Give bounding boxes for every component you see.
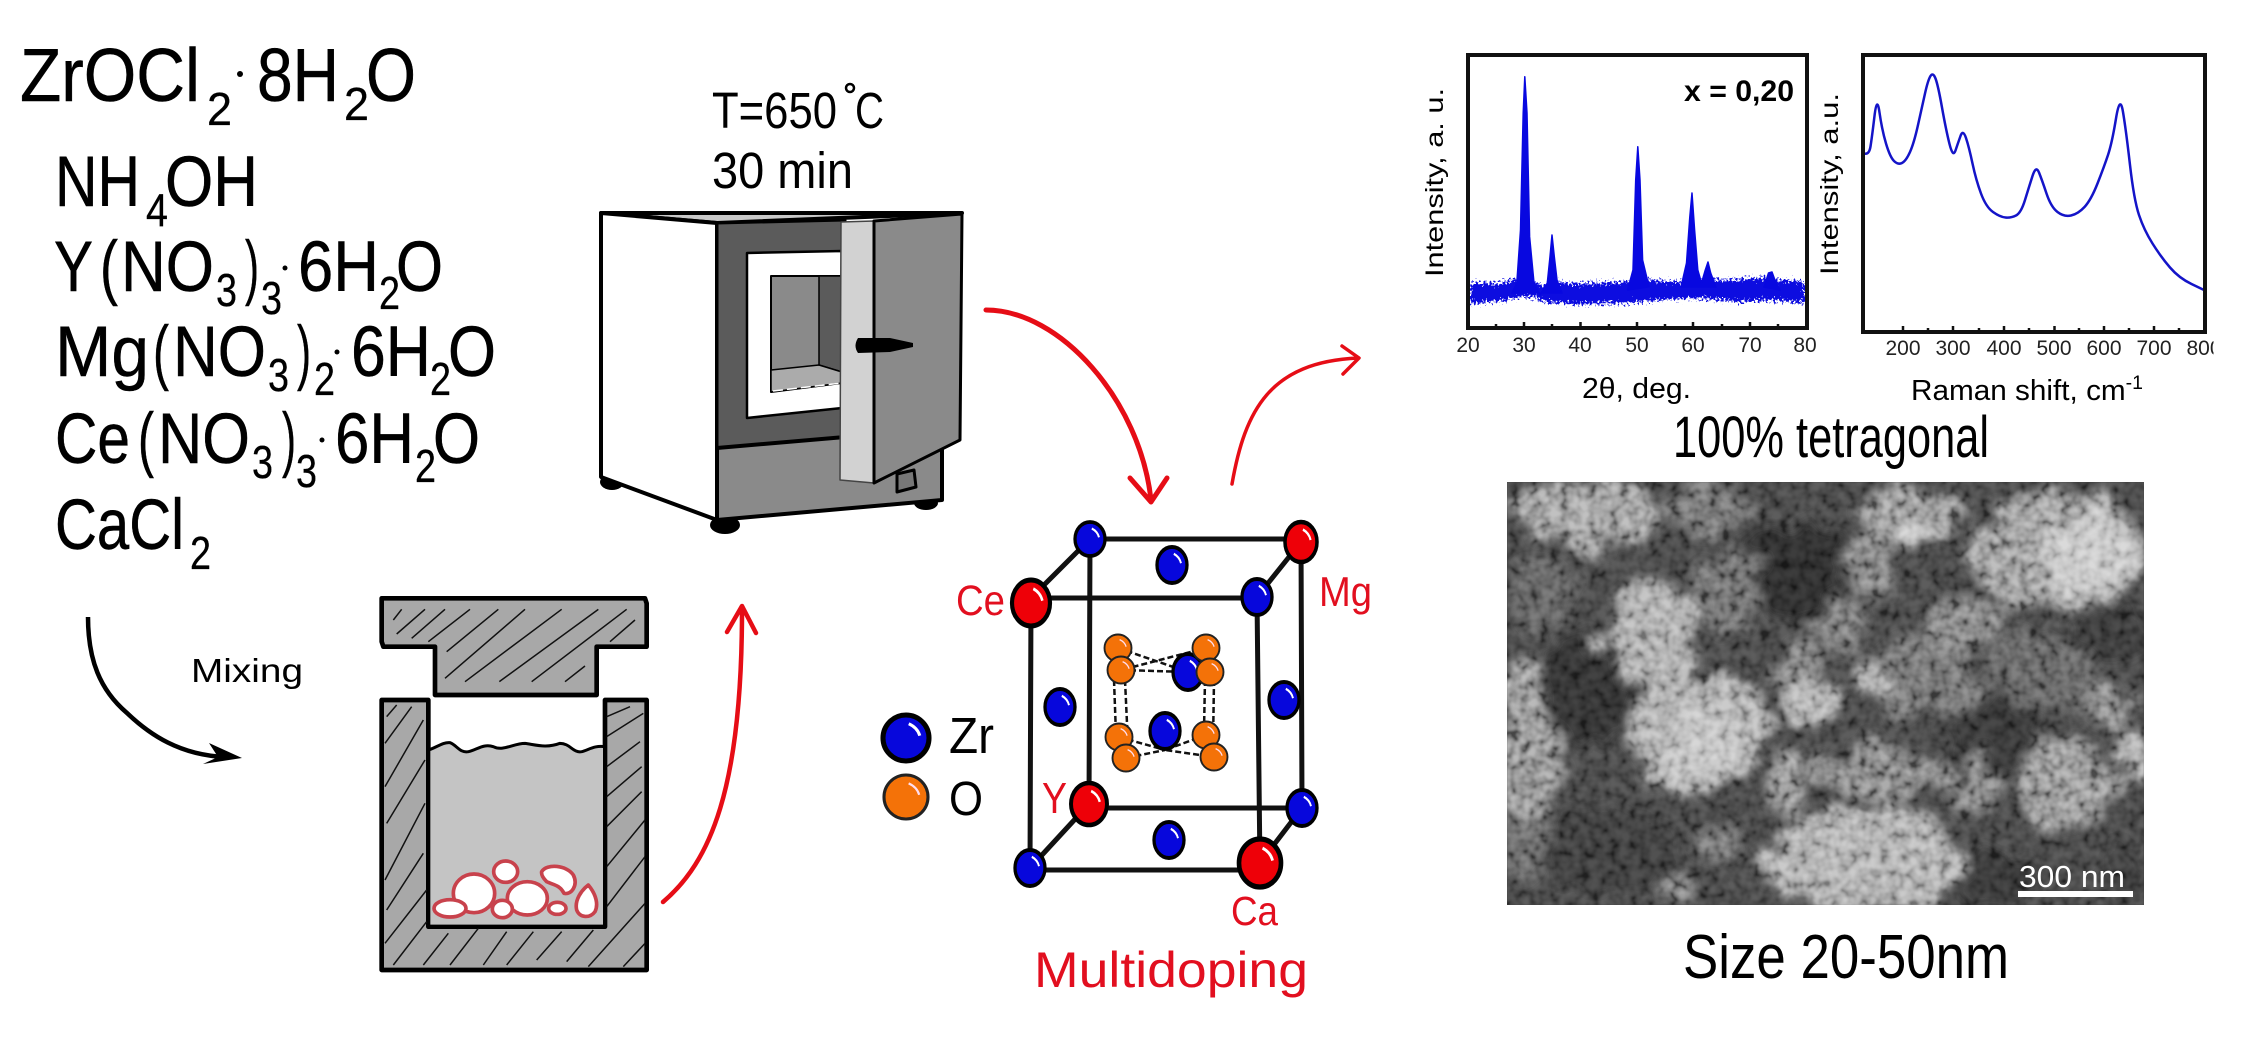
- XRD x axis label: 2θ, deg.: [1582, 373, 1691, 405]
- formula: ZrOCl2·8H2O: O: [366, 33, 416, 117]
- Raman y axis label: Intensity, a.u.: [1816, 93, 1844, 275]
- formula: Mg(NO3)2·6H2O: 2: [430, 353, 451, 405]
- furnace lower panel: [717, 437, 942, 520]
- XRD tick labels: 60: [1681, 334, 1705, 357]
- formula: Ce(NO3)3·6H2O: 2: [415, 440, 436, 492]
- heading: Multidoping: Multidoping: [1034, 942, 1308, 998]
- XRD axes frame: [1468, 55, 1807, 328]
- arrow: furnace to crystal: [986, 310, 1167, 502]
- blue Zr atoms: [1015, 522, 1317, 886]
- formula: Ce(NO3)3·6H2O: (: [138, 400, 154, 479]
- XRD peaks: [1512, 77, 1780, 295]
- legend: atoms: [883, 707, 994, 826]
- autoclave lid: [382, 598, 647, 695]
- dashed inner bonds: [1114, 648, 1214, 758]
- formula: Mg(NO3)2·6H2O: NO: [173, 313, 266, 392]
- furnace top: [601, 213, 962, 223]
- scale bar: 300 nm: [2019, 859, 2125, 894]
- Raman tick labels: 600: [2086, 337, 2122, 360]
- legend O: O: [949, 773, 983, 826]
- furnace opening: [747, 251, 842, 418]
- label: Ce: Ce: [956, 577, 1005, 625]
- door handle: [856, 338, 913, 353]
- formula: NH4OH: [55, 143, 258, 236]
- formula: Y(NO3)3·6H2O: 2: [379, 267, 400, 319]
- formula: Mg(NO3)2·6H2O: ): [297, 313, 311, 392]
- formula: NH4OH: 4: [146, 184, 168, 236]
- Raman axes frame: [1863, 55, 2205, 332]
- XRD tick labels: 30: [1512, 334, 1536, 357]
- formula: ZrOCl2·8H2O: [20, 33, 416, 135]
- formula: Ce(NO3)3·6H2O: 6H: [335, 400, 414, 479]
- label: Ca: Ca: [1231, 888, 1278, 934]
- furnace door edge: [840, 221, 874, 483]
- image: SEM micrograph: [1507, 482, 2144, 905]
- text: furnace conditions: T=650: [712, 82, 837, 139]
- XRD tick labels: 50: [1625, 334, 1649, 357]
- XRD tick labels: [1456, 334, 1817, 357]
- Raman ticks: [1903, 326, 2179, 332]
- panel: precursor formulas: [20, 33, 496, 579]
- XRD tick labels: 40: [1568, 334, 1592, 357]
- formula: CaCl2: CaCl: [55, 486, 184, 565]
- furnace door: [874, 214, 962, 483]
- orange oxygen atoms: [1104, 634, 1228, 772]
- XRD tick labels: 20: [1456, 334, 1480, 357]
- formula: Mg(NO3)2·6H2O: Mg: [55, 313, 149, 392]
- formula: Ce(NO3)3·6H2O: ): [282, 400, 296, 479]
- Raman tick labels: 400: [1986, 337, 2022, 360]
- formula: Y(NO3)3·6H2O: ): [245, 228, 259, 307]
- Raman x axis label: -1: [2126, 373, 2143, 394]
- SEM light and dark regions: [1507, 482, 2144, 905]
- formula: Ce(NO3)3·6H2O: 3: [296, 445, 317, 497]
- formula: Mg(NO3)2·6H2O: [55, 313, 496, 405]
- Raman x axis label: Raman shift, cm: [1911, 375, 2120, 407]
- Raman tick labels: 700: [2136, 337, 2172, 360]
- furnace front frame: [717, 220, 845, 448]
- switch: [897, 470, 916, 492]
- formula: Y(NO3)3·6H2O: Y: [54, 228, 93, 307]
- formula: Y(NO3)3·6H2O: (: [100, 228, 118, 307]
- formula: Ce(NO3)3·6H2O: [55, 400, 480, 497]
- scale bar: [2018, 866, 2133, 897]
- furnace side: [601, 213, 717, 520]
- formula: ZrOCl2·8H2O: 2: [344, 78, 369, 130]
- formula: CaCl2: 2: [190, 527, 211, 579]
- icon: muffle furnace: [600, 213, 962, 534]
- formula: Y(NO3)3·6H2O: O: [396, 228, 443, 307]
- text: furnace conditions: C: [855, 82, 884, 139]
- formula: ZrOCl2·8H2O: ZrOCl: [20, 33, 200, 117]
- formula: Mg(NO3)2·6H2O: O: [448, 313, 496, 392]
- Raman tick labels: 800: [2186, 337, 2222, 360]
- arrow: crystal to characterization: [1232, 346, 1359, 484]
- text: furnace conditions: [712, 82, 884, 199]
- Raman tick labels: 300: [1935, 337, 1971, 360]
- formula: Y(NO3)3·6H2O: [54, 228, 443, 324]
- XRD tick labels: 70: [1738, 334, 1762, 357]
- Raman tick labels: 500: [2036, 337, 2072, 360]
- formula: NH4OH: NH: [55, 143, 140, 222]
- Raman tick labels: [1886, 340, 2214, 355]
- XRD y axis label: Intensity, a. u.: [1421, 88, 1449, 277]
- formula: Mg(NO3)2·6H2O: 6H: [351, 313, 431, 392]
- XRD tick labels: 80: [1793, 334, 1817, 357]
- Raman curve: [1863, 74, 2204, 290]
- XRD ticks: [1468, 322, 1778, 328]
- label: Mixing: Mixing: [191, 652, 303, 689]
- chart: XRD pattern: [1421, 55, 1817, 405]
- formula: Y(NO3)3·6H2O: 3: [216, 264, 237, 316]
- formula: Mg(NO3)2·6H2O: 3: [268, 349, 289, 401]
- autoclave body: [382, 700, 647, 970]
- formula: Mg(NO3)2·6H2O: 2: [314, 353, 335, 405]
- Raman tick labels: 200: [1885, 337, 1921, 360]
- formula: Ce(NO3)3·6H2O: O: [433, 400, 480, 479]
- diagram: crystal unit cell: [956, 522, 1372, 934]
- SEM particle grain: [1507, 482, 2144, 905]
- chart: Raman spectrum: [1816, 55, 2222, 407]
- XRD noisy baseline: [1470, 278, 1805, 304]
- icon: autoclave vessel: [382, 598, 647, 970]
- formula: ZrOCl2·8H2O: 2: [207, 83, 232, 135]
- caption: 100% tetragonal: 100% tetragonal: [1673, 405, 1989, 470]
- arrow: mixing: [88, 617, 242, 764]
- label: Y: Y: [1042, 774, 1067, 823]
- formula: Y(NO3)3·6H2O: NO: [121, 228, 214, 307]
- arrow: autoclave to furnace: [663, 606, 756, 902]
- legend Zr: Zr: [949, 707, 994, 764]
- formula: NH4OH: OH: [165, 143, 258, 222]
- text: furnace conditions: 30 min: [712, 142, 853, 199]
- liquid in vessel: [428, 743, 605, 925]
- formula: Ce(NO3)3·6H2O: Ce: [55, 400, 130, 479]
- unit cell frame: [1030, 539, 1302, 870]
- composition label: x = 0,20: [1684, 75, 1794, 108]
- formula: Mg(NO3)2·6H2O: (: [153, 313, 169, 392]
- formula: Ce(NO3)3·6H2O: NO: [158, 400, 250, 479]
- red dopant atoms: [1012, 522, 1317, 887]
- label: Mg: Mg: [1319, 568, 1372, 615]
- formula: Ce(NO3)3·6H2O: 3: [252, 436, 273, 488]
- formula: Y(NO3)3·6H2O: 6H: [298, 228, 379, 307]
- formula: ZrOCl2·8H2O: 8H: [257, 33, 339, 117]
- formula: Y(NO3)3·6H2O: 3: [261, 272, 282, 324]
- furnace feet: [600, 474, 938, 534]
- precursor particles: [434, 861, 597, 918]
- caption: size: Size 20-50nm: [1683, 923, 2009, 992]
